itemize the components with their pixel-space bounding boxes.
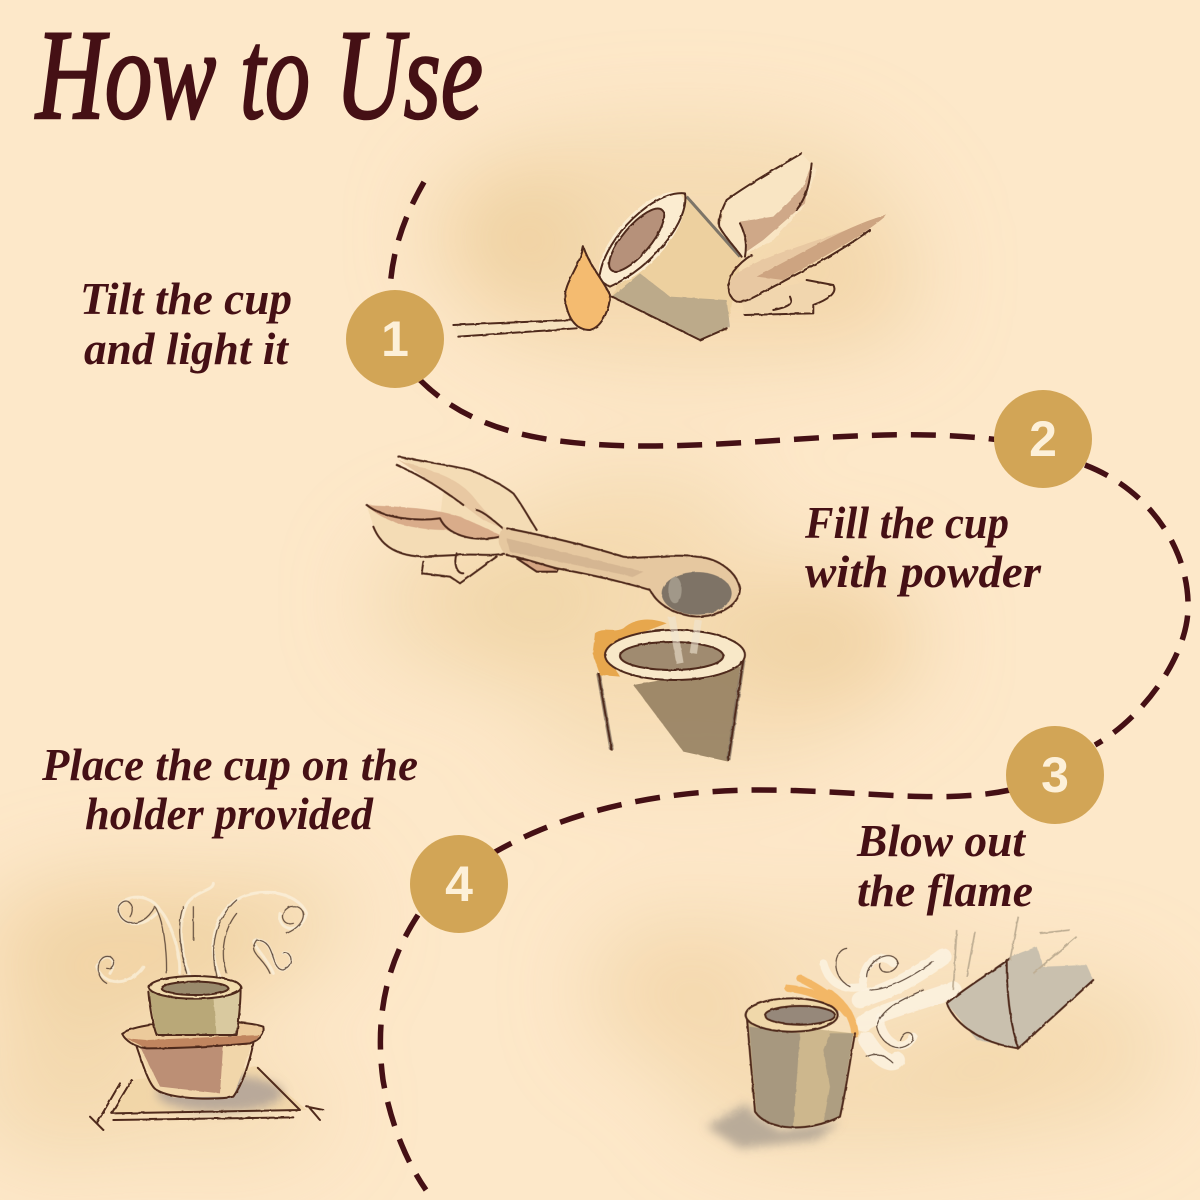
step 4 marker — [410, 835, 508, 933]
step 1 text: Tilt the cup — [80, 274, 292, 324]
title: to — [240, 4, 310, 146]
dashed path — [380, 182, 1188, 1190]
title: How — [35, 4, 216, 146]
title: Use — [335, 4, 483, 146]
step 3 marker — [1006, 726, 1104, 824]
step 3 text: Blow out — [856, 816, 1027, 866]
step 4 text: holder provided — [85, 789, 374, 839]
step 3 marker: 3 — [1041, 747, 1069, 803]
illustration: cup on holder with smoke — [90, 883, 323, 1130]
step 1 text: and light it — [84, 324, 289, 374]
step 4 text: Place the cup on the — [41, 740, 418, 790]
step 3 text: the flame — [857, 866, 1033, 916]
step 1 marker: 1 — [381, 311, 409, 367]
illustration: blowing out the flame — [707, 917, 1093, 1148]
step 2 marker — [994, 390, 1092, 488]
illustration: lighting the tilted cup — [453, 153, 887, 340]
illustration: spoon filling the cup — [367, 457, 745, 762]
step 4 marker: 4 — [445, 856, 473, 912]
step 1 marker — [346, 290, 444, 388]
step 2 text: with powder — [805, 547, 1042, 597]
step 2 marker: 2 — [1029, 411, 1057, 467]
step 2 text: Fill the cup — [804, 498, 1009, 548]
